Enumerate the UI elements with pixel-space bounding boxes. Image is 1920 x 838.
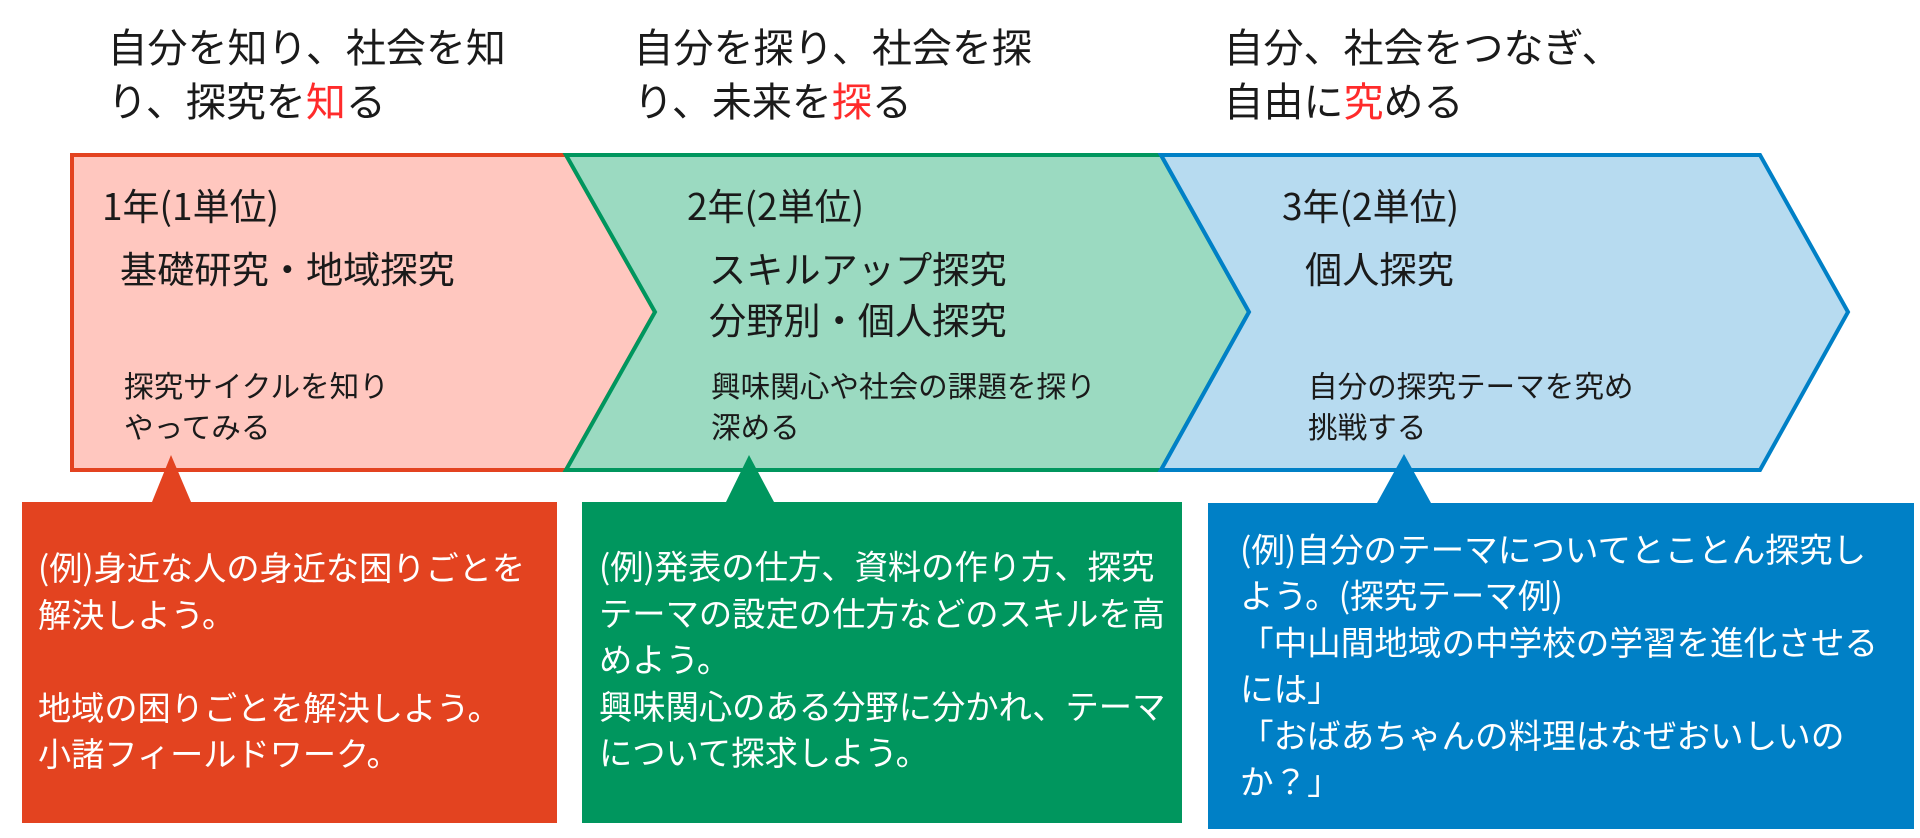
panel: year 1 arrow bbox=[72, 155, 655, 470]
heading: year 3 goal: 自分、社会をつなぎ、 bbox=[1224, 16, 1622, 74]
heading: year 3 goal bbox=[1224, 16, 1622, 128]
callout: year 3 examples: には」 bbox=[1240, 662, 1341, 711]
heading: year 2 goal bbox=[634, 16, 1032, 128]
panel: year 1 arrow: 探究サイクルを知り bbox=[124, 363, 389, 406]
heading: year 3 goal: 自由に究める bbox=[1224, 70, 1464, 128]
callout: year 2 examples bbox=[582, 455, 1182, 823]
panel: year 3 arrow: 3年(2単位) bbox=[1282, 177, 1459, 231]
panel: year 3 arrow bbox=[1161, 155, 1848, 470]
panel: year 2 arrow: 2年(2単位) bbox=[687, 177, 864, 231]
heading: year 1 goal bbox=[108, 16, 506, 128]
panel: year 2 arrow: スキルアップ探究 bbox=[709, 240, 1007, 294]
callout: year 2 examples: テーマの設定の仕方などのスキルを高 bbox=[599, 587, 1165, 636]
heading: year 2 goal: 自分を探り、社会を探 bbox=[634, 16, 1032, 74]
callout: year 2 examples: めよう。 bbox=[599, 633, 730, 682]
panel: year 3 arrow: 挑戦する bbox=[1308, 404, 1426, 447]
callout: year 1 examples: 小諸フィールドワーク。 bbox=[38, 727, 400, 776]
callout: year 2 examples: (例)発表の仕方、資料の作り方、探究 bbox=[599, 540, 1154, 589]
callout: year 1 examples: 解決しよう。 bbox=[38, 588, 235, 637]
panel: year 1 arrow: やってみる bbox=[124, 404, 270, 447]
callout: year 2 examples: 興味関心のある分野に分かれ、テーマ bbox=[599, 680, 1165, 729]
heading: year 2 goal: り、未来を探る bbox=[634, 70, 912, 128]
callout: year 1 examples bbox=[22, 455, 557, 823]
callout: year 2 examples: について探求しよう。 bbox=[599, 726, 929, 775]
panel: year 1 arrow: 基礎研究・地域探究 bbox=[120, 240, 455, 294]
callout: year 3 examples: 「中山間地域の中学校の学習を進化させる bbox=[1240, 616, 1878, 665]
panel: year 3 arrow: 個人探究 bbox=[1305, 240, 1454, 294]
callout: year 3 examples: よう。(探究テーマ例) bbox=[1240, 569, 1563, 618]
callout: year 3 examples: 「おばあちゃんの料理はなぜおいしいの bbox=[1240, 709, 1844, 758]
heading: year 1 goal: 自分を知り、社会を知 bbox=[108, 16, 506, 74]
panel: year 1 arrow: 1年(1単位) bbox=[102, 177, 279, 231]
panel: year 3 arrow: 自分の探究テーマを究め bbox=[1308, 363, 1634, 406]
heading: year 1 goal: り、探究を知る bbox=[108, 70, 386, 128]
callout: year 3 examples: か？」 bbox=[1240, 755, 1341, 804]
callout: year 3 examples bbox=[1208, 454, 1914, 829]
panel: year 2 arrow: 深める bbox=[711, 404, 800, 447]
panel: year 2 arrow bbox=[566, 155, 1249, 470]
panel: year 2 arrow: 興味関心や社会の課題を探り bbox=[711, 363, 1096, 406]
panel: year 2 arrow: 分野別・個人探究 bbox=[709, 291, 1007, 345]
callout: year 1 examples: (例)身近な人の身近な困りごとを bbox=[38, 541, 525, 590]
callout: year 3 examples: (例)自分のテーマについてとことん探究し bbox=[1240, 523, 1866, 572]
callout: year 1 examples: 地域の困りごとを解決しよう。 bbox=[38, 681, 501, 730]
